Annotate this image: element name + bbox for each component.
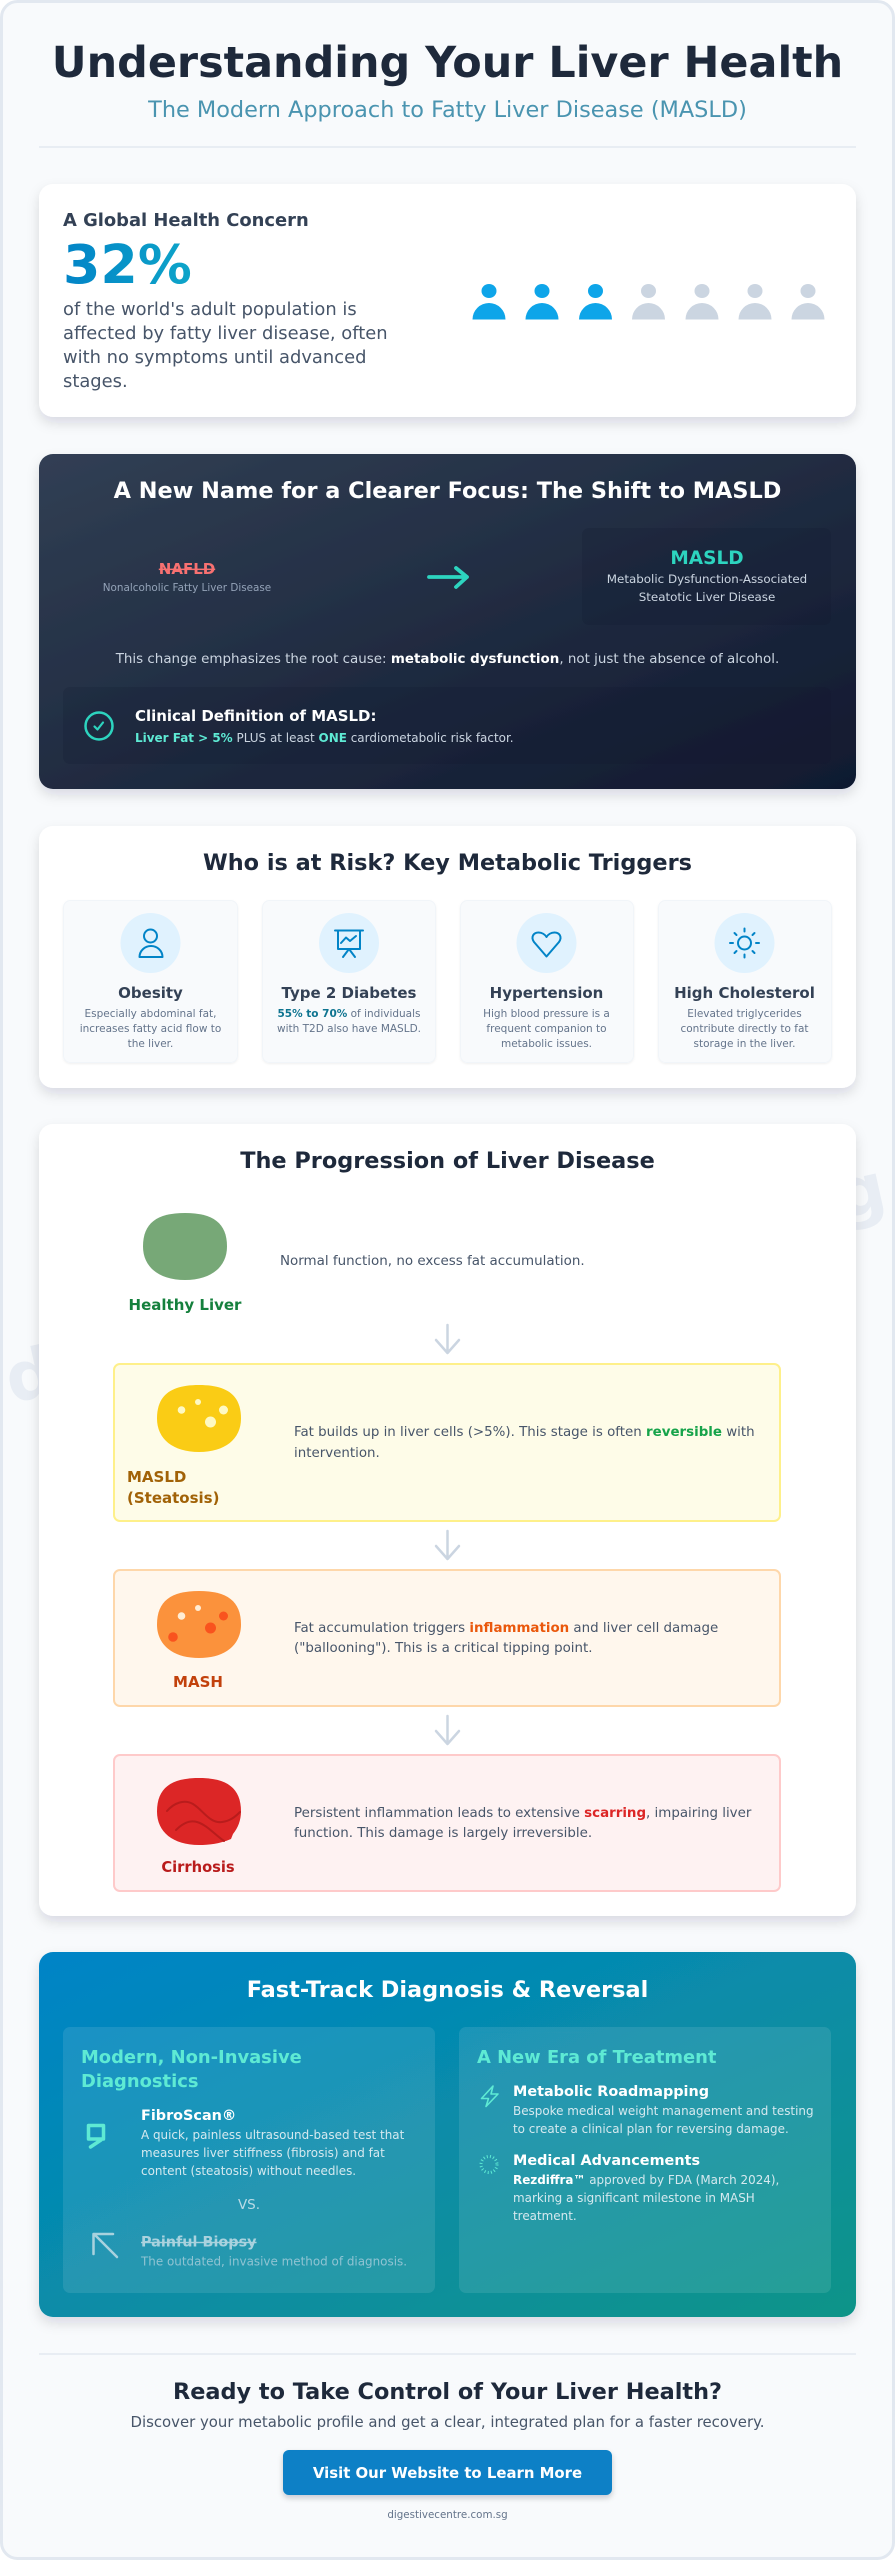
card: type 2 diabetes — [262, 900, 436, 1062]
card: hypertension: Hypertension — [490, 984, 603, 1002]
title: Understanding Your Liver Health — [52, 38, 843, 88]
sub-panel: diagnostics: content (steatosis) without needles. — [141, 2164, 356, 2178]
subtitle: The Modern Approach to Fatty Liver Disease (MASLD) — [147, 97, 747, 123]
arrow: down — [436, 1716, 459, 1744]
sub-panel: treatment: Medical Advancements — [513, 2153, 700, 2169]
card: obesity: the liver. — [128, 1038, 173, 1050]
stage: cirrhosis: Persistent inflammation leads to extensive scarring, impairing liver — [294, 1806, 751, 1821]
stage: MASH — [114, 1570, 780, 1706]
card: high cholesterol — [658, 900, 832, 1062]
sub-panel: diagnostics — [63, 2027, 435, 2293]
panel heading: Who is at Risk? Key Metabolic Triggers — [203, 850, 692, 876]
statistic description: of the world's adult population is — [63, 299, 357, 320]
sub-panel: diagnostics: The outdated, invasive method of diagnosis. — [140, 2254, 407, 2268]
sub-panel: treatment: Rezdiffra™ approved by FDA (March 2024), — [513, 2173, 779, 2187]
new name: MASLD: Steatotic Liver Disease — [639, 590, 775, 604]
card: obesity: Especially abdominal fat, — [84, 1008, 217, 1020]
heading: A Global Health Concern — [63, 210, 309, 231]
stage: MASH: Fat accumulation triggers inflammation and liver cell damage — [294, 1621, 718, 1636]
sub-panel: treatment: to create a clinical plan for reversing damage. — [513, 2122, 789, 2136]
new name: MASLD: MASLD — [670, 548, 744, 569]
stage: cirrhosis: Cirrhosis — [161, 1859, 235, 1876]
icon: biopsy needle arrow — [94, 2234, 117, 2257]
stage: MASLD steatosis — [114, 1364, 780, 1521]
old name: NAFLD: NAFLD — [159, 560, 215, 578]
panel heading: The Progression of Liver Disease — [240, 1148, 655, 1174]
stage: MASH: MASH — [173, 1673, 223, 1691]
card: hypertension: High blood pressure is a — [483, 1008, 610, 1020]
sub-panel: diagnostics: Modern, Non-Invasive — [81, 2047, 302, 2068]
old name: NAFLD: Nonalcoholic Fatty Liver Disease — [103, 582, 271, 594]
footer website: digestivecentre.com.sg — [387, 2509, 508, 2521]
arrow: down — [436, 1325, 459, 1353]
sub-panel: treatment: treatment. — [513, 2209, 577, 2223]
card: high cholesterol: Elevated triglycerides — [687, 1008, 802, 1020]
statistic description: with no symptoms until advanced — [63, 347, 366, 368]
clinical definition box — [63, 687, 831, 764]
stage: MASLD steatosis: MASLD — [127, 1468, 186, 1486]
sub-panel: treatment — [459, 2027, 831, 2293]
icon: check circle — [86, 712, 112, 740]
statistic description: affected by fatty liver disease, often — [63, 323, 388, 344]
icon row: people, 3 of 7 highlighted — [472, 284, 824, 320]
icon: lightning bolt — [482, 2086, 498, 2106]
panel: global health concern — [39, 184, 856, 417]
stage: MASLD steatosis: Fat builds up in liver cells (>5%). This stage is often reversible with — [294, 1425, 755, 1440]
icon: inflamed liver — [157, 1591, 241, 1658]
sub-panel: diagnostics: Painful Biopsy — [141, 2234, 257, 2250]
icon: chart presentation — [335, 930, 363, 957]
arrow: down — [436, 1531, 459, 1559]
clinical definition box: Clinical Definition of MASLD: — [135, 707, 376, 725]
panel: who is at risk — [39, 826, 856, 1088]
card: obesity: Obesity — [118, 984, 183, 1002]
card: type 2 diabetes: Type 2 Diabetes — [282, 984, 417, 1002]
card: high cholesterol: High Cholesterol — [674, 984, 815, 1002]
stage: MASH: ("ballooning"). This is a critical tipping point. — [294, 1641, 592, 1656]
sub-panel: diagnostics: Diagnostics — [81, 2071, 198, 2092]
old name: NAFLD — [103, 560, 271, 594]
call to action text: Discover your metabolic profile and get a clear, integrated plan for a faster recovery. — [130, 2413, 765, 2431]
card: hypertension — [460, 900, 634, 1062]
arrow: NAFLD to MASLD — [429, 568, 467, 587]
call to action heading: Ready to Take Control of Your Liver Health? — [173, 2379, 722, 2405]
panel: diagnosis and reversal — [39, 1952, 856, 2317]
card: high cholesterol: storage in the liver. — [694, 1038, 795, 1050]
panel: progression of liver disease — [39, 1124, 856, 1916]
versus label: VS. — [238, 2197, 260, 2213]
stage: MASLD steatosis: (Steatosis) — [127, 1489, 219, 1507]
new name: MASLD: Metabolic Dysfunction-Associated — [607, 572, 807, 586]
panel heading: Fast-Track Diagnosis & Reversal — [247, 1977, 648, 2003]
button — [283, 2450, 612, 2495]
sub-panel: treatment: A New Era of Treatment — [477, 2047, 717, 2068]
icon: person — [140, 930, 162, 957]
icon: dotted circle — [481, 2156, 497, 2172]
stage: cirrhosis: function. This damage is largely irreversible. — [294, 1826, 592, 1841]
card: type 2 diabetes: 55% to 70% of individuals — [277, 1008, 421, 1020]
statistic: 32% — [63, 233, 192, 296]
icon: fibroscan device — [88, 2126, 104, 2147]
panel heading: A New Name for a Clearer Focus: The Shift to MASLD — [114, 478, 781, 504]
card: obesity — [64, 900, 238, 1062]
statistic description: stages. — [63, 371, 128, 392]
button: Visit Our Website to Learn More — [313, 2464, 582, 2482]
card: hypertension: metabolic issues. — [501, 1038, 592, 1050]
card: high cholesterol: contribute directly to fat — [680, 1023, 809, 1035]
panel: shift to MASLD — [39, 454, 856, 789]
icon: scarred liver — [157, 1778, 241, 1845]
sub-panel: diagnostics: measures liver stiffness (fibrosis) and fat — [141, 2146, 385, 2160]
stage: healthy liver — [129, 1213, 585, 1314]
icon: fatty liver — [157, 1385, 241, 1452]
icon: heart — [532, 932, 561, 956]
sub-panel: diagnostics: FibroScan® — [141, 2108, 236, 2124]
watermark: digestivecentre.com.sg — [0, 1148, 893, 1420]
icon: sun — [730, 928, 759, 958]
sub-panel: treatment: Bespoke medical weight management and testing — [513, 2104, 814, 2118]
sub-panel: treatment: marking a significant milestone in MASH — [513, 2191, 755, 2205]
stage: healthy liver: Normal function, no excess fat accumulation. — [280, 1254, 585, 1269]
card: hypertension: frequent companion to — [486, 1023, 607, 1035]
new name: MASLD — [582, 528, 831, 625]
card: obesity: increases fatty acid flow to — [80, 1023, 221, 1035]
explanation: This change emphasizes the root cause: metabolic dysfunction, not just the absence of alcohol. — [115, 652, 779, 667]
stage: MASLD steatosis: intervention. — [294, 1446, 380, 1461]
stage: healthy liver: Healthy Liver — [129, 1296, 242, 1314]
clinical definition box: Liver Fat > 5% PLUS at least ONE cardiometabolic risk factor. — [135, 731, 514, 745]
sub-panel: diagnostics: A quick, painless ultrasound-based test that — [141, 2128, 405, 2142]
stage: cirrhosis — [114, 1755, 780, 1891]
sub-panel: treatment: Metabolic Roadmapping — [513, 2084, 709, 2100]
icon: healthy liver — [143, 1213, 227, 1280]
card: type 2 diabetes: with T2D also have MASLD. — [277, 1023, 421, 1035]
